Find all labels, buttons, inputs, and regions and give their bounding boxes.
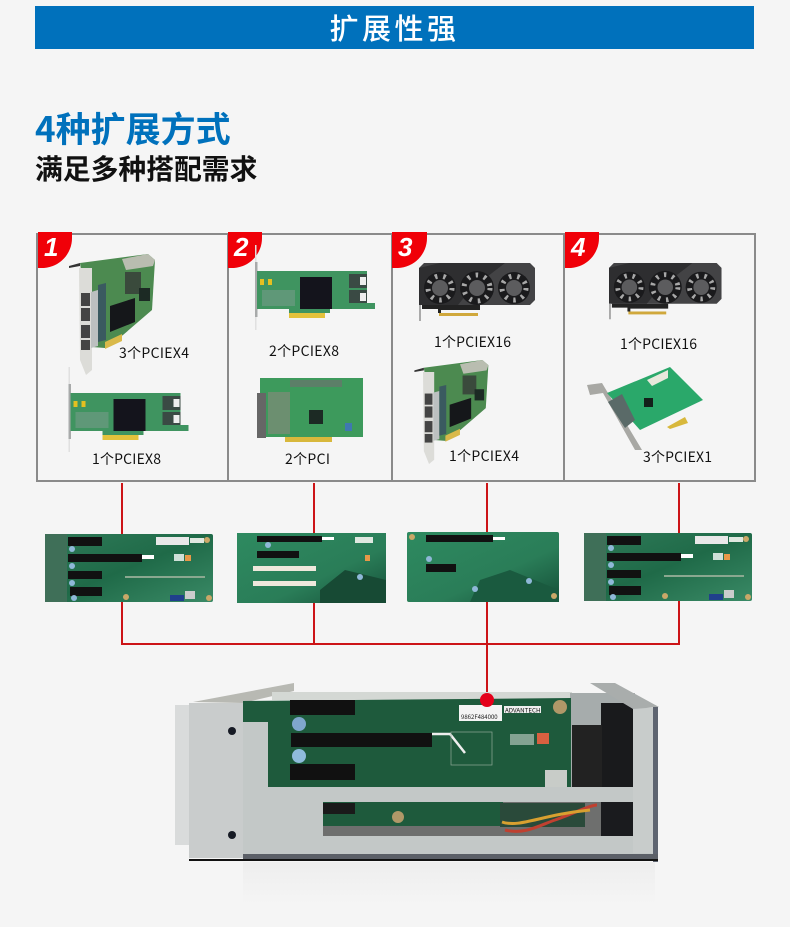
fan bbox=[601, 703, 636, 833]
panel: option 3: 3 bbox=[398, 232, 413, 262]
panel: option 2: 2个PCIEX8 bbox=[269, 341, 339, 361]
front panel bbox=[189, 703, 243, 858]
panel: option 1: 1个PCIEX8 bbox=[92, 449, 161, 469]
connection dot bbox=[480, 693, 494, 707]
lower window bbox=[323, 802, 633, 836]
right interior bbox=[570, 693, 635, 789]
panel: option 4: 4 bbox=[570, 232, 586, 262]
connector lines bbox=[122, 483, 679, 700]
labels on board bbox=[459, 705, 502, 721]
panel: option 3: 1个PCIEX16 bbox=[434, 332, 511, 352]
chassis product photo: ADVANTECH bbox=[505, 706, 540, 714]
panel: option 2 bbox=[228, 232, 375, 469]
panel: option 4 bbox=[565, 232, 722, 467]
capacitors bbox=[292, 717, 306, 731]
riser board 3 bbox=[407, 532, 559, 602]
title bbox=[35, 102, 258, 188]
title: 满足多种搭配需求 bbox=[35, 148, 258, 188]
slots bbox=[290, 700, 355, 715]
header banner: 扩展性强 bbox=[329, 6, 460, 48]
panel: option 1 bbox=[38, 232, 189, 469]
riser board 2 bbox=[237, 533, 386, 603]
side plate bbox=[243, 703, 655, 855]
title: 4种扩展方式 bbox=[35, 102, 231, 153]
header banner bbox=[35, 6, 754, 49]
panel: option 3: 1个PCIEX4 bbox=[449, 446, 519, 466]
panel: option 1: 3个PCIEX4 bbox=[119, 343, 189, 363]
panel: option 4: 1个PCIEX16 bbox=[620, 334, 697, 354]
right plate bbox=[633, 708, 653, 853]
panel: option 2: 2个PCI bbox=[285, 449, 330, 469]
base edge bbox=[243, 854, 658, 861]
chassis product photo bbox=[175, 683, 659, 904]
slot latch bbox=[432, 734, 465, 753]
panel: option 2: 2 bbox=[233, 232, 249, 262]
top rail bbox=[272, 692, 572, 700]
chassis product photo: 9862F484000 bbox=[461, 712, 498, 721]
panel: expansion options table bbox=[37, 234, 755, 481]
panel: option 1: 1 bbox=[44, 232, 58, 262]
panel: option 3 bbox=[392, 232, 535, 466]
riser board 1 bbox=[45, 534, 213, 602]
mounting ear bbox=[175, 705, 190, 845]
panel: option 4: 3个PCIEX1 bbox=[643, 447, 712, 467]
reflection bbox=[243, 862, 655, 904]
riser board 4 bbox=[584, 533, 752, 601]
top flange bbox=[193, 683, 294, 703]
riser PCB bbox=[243, 698, 571, 787]
